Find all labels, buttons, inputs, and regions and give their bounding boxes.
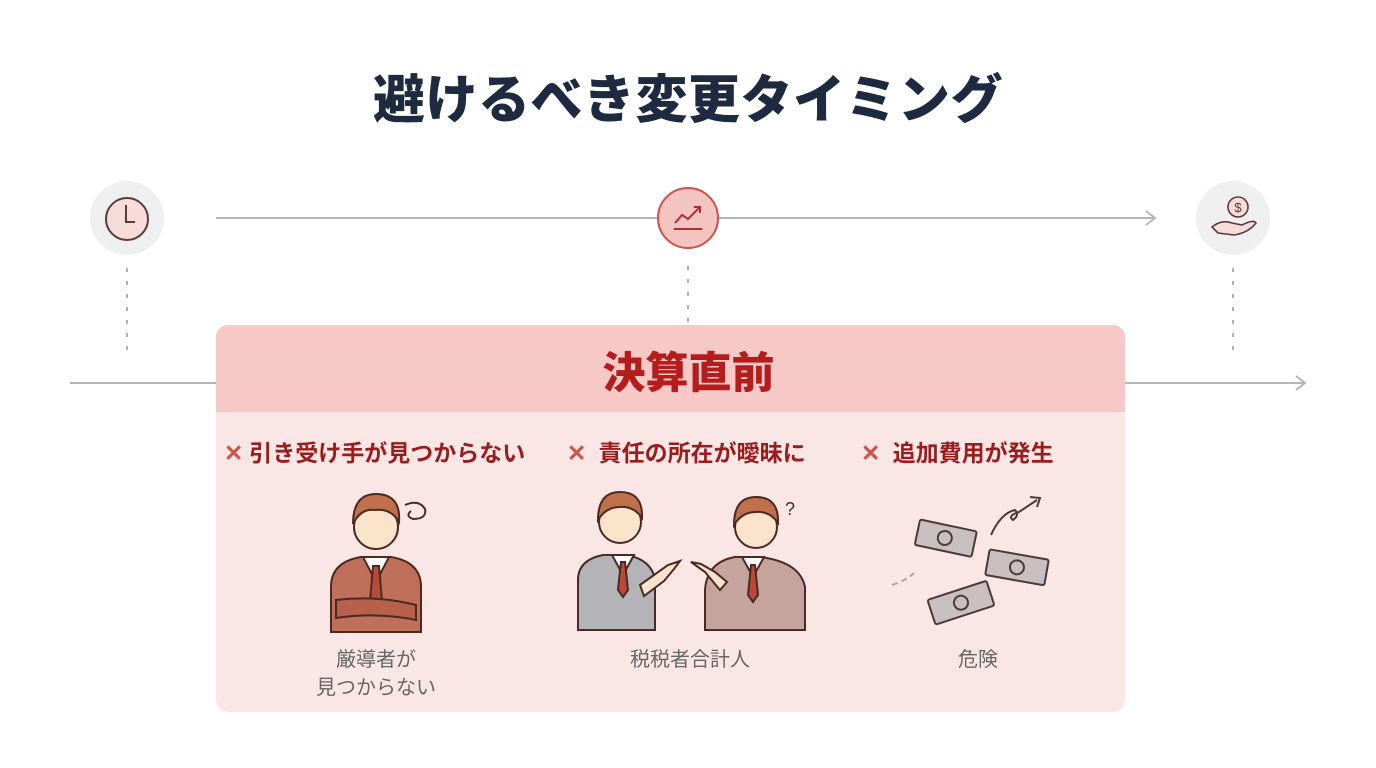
caption: col2: 税税者合計人 xyxy=(630,649,750,671)
icon: clock xyxy=(90,181,164,255)
icon: money hand: $ xyxy=(1234,200,1242,215)
heading: col2: ✕ 責任の所在が曖昧に xyxy=(567,440,806,466)
title: 避けるべき変更タイミング xyxy=(373,72,1003,130)
icon: flying money xyxy=(892,497,1049,625)
person: brown suit pointing: ? xyxy=(785,499,795,519)
heading: col3: ✕ 追加費用が発生 xyxy=(861,440,1054,466)
caption: col1: 厳導者が xyxy=(336,649,416,671)
person: grey suit pointing xyxy=(578,492,680,630)
panel: 決算直前 xyxy=(216,325,1125,712)
caption: col1: 見つからない xyxy=(316,677,436,699)
lower arrow line xyxy=(70,376,1305,390)
dotted connectors xyxy=(127,266,1233,355)
icon: money hand xyxy=(1196,181,1270,255)
panel header: 決算直前 xyxy=(602,350,774,398)
person: arms crossed xyxy=(331,494,425,632)
upper arrow line xyxy=(216,211,1155,225)
person: brown suit pointing xyxy=(691,497,805,630)
caption: col1 xyxy=(316,649,436,699)
panel header xyxy=(216,325,1125,412)
caption: col3: 危険 xyxy=(958,649,998,671)
heading: col1: ✕ 引き受け手が見つからない xyxy=(224,440,525,466)
icon: trend xyxy=(658,188,718,248)
